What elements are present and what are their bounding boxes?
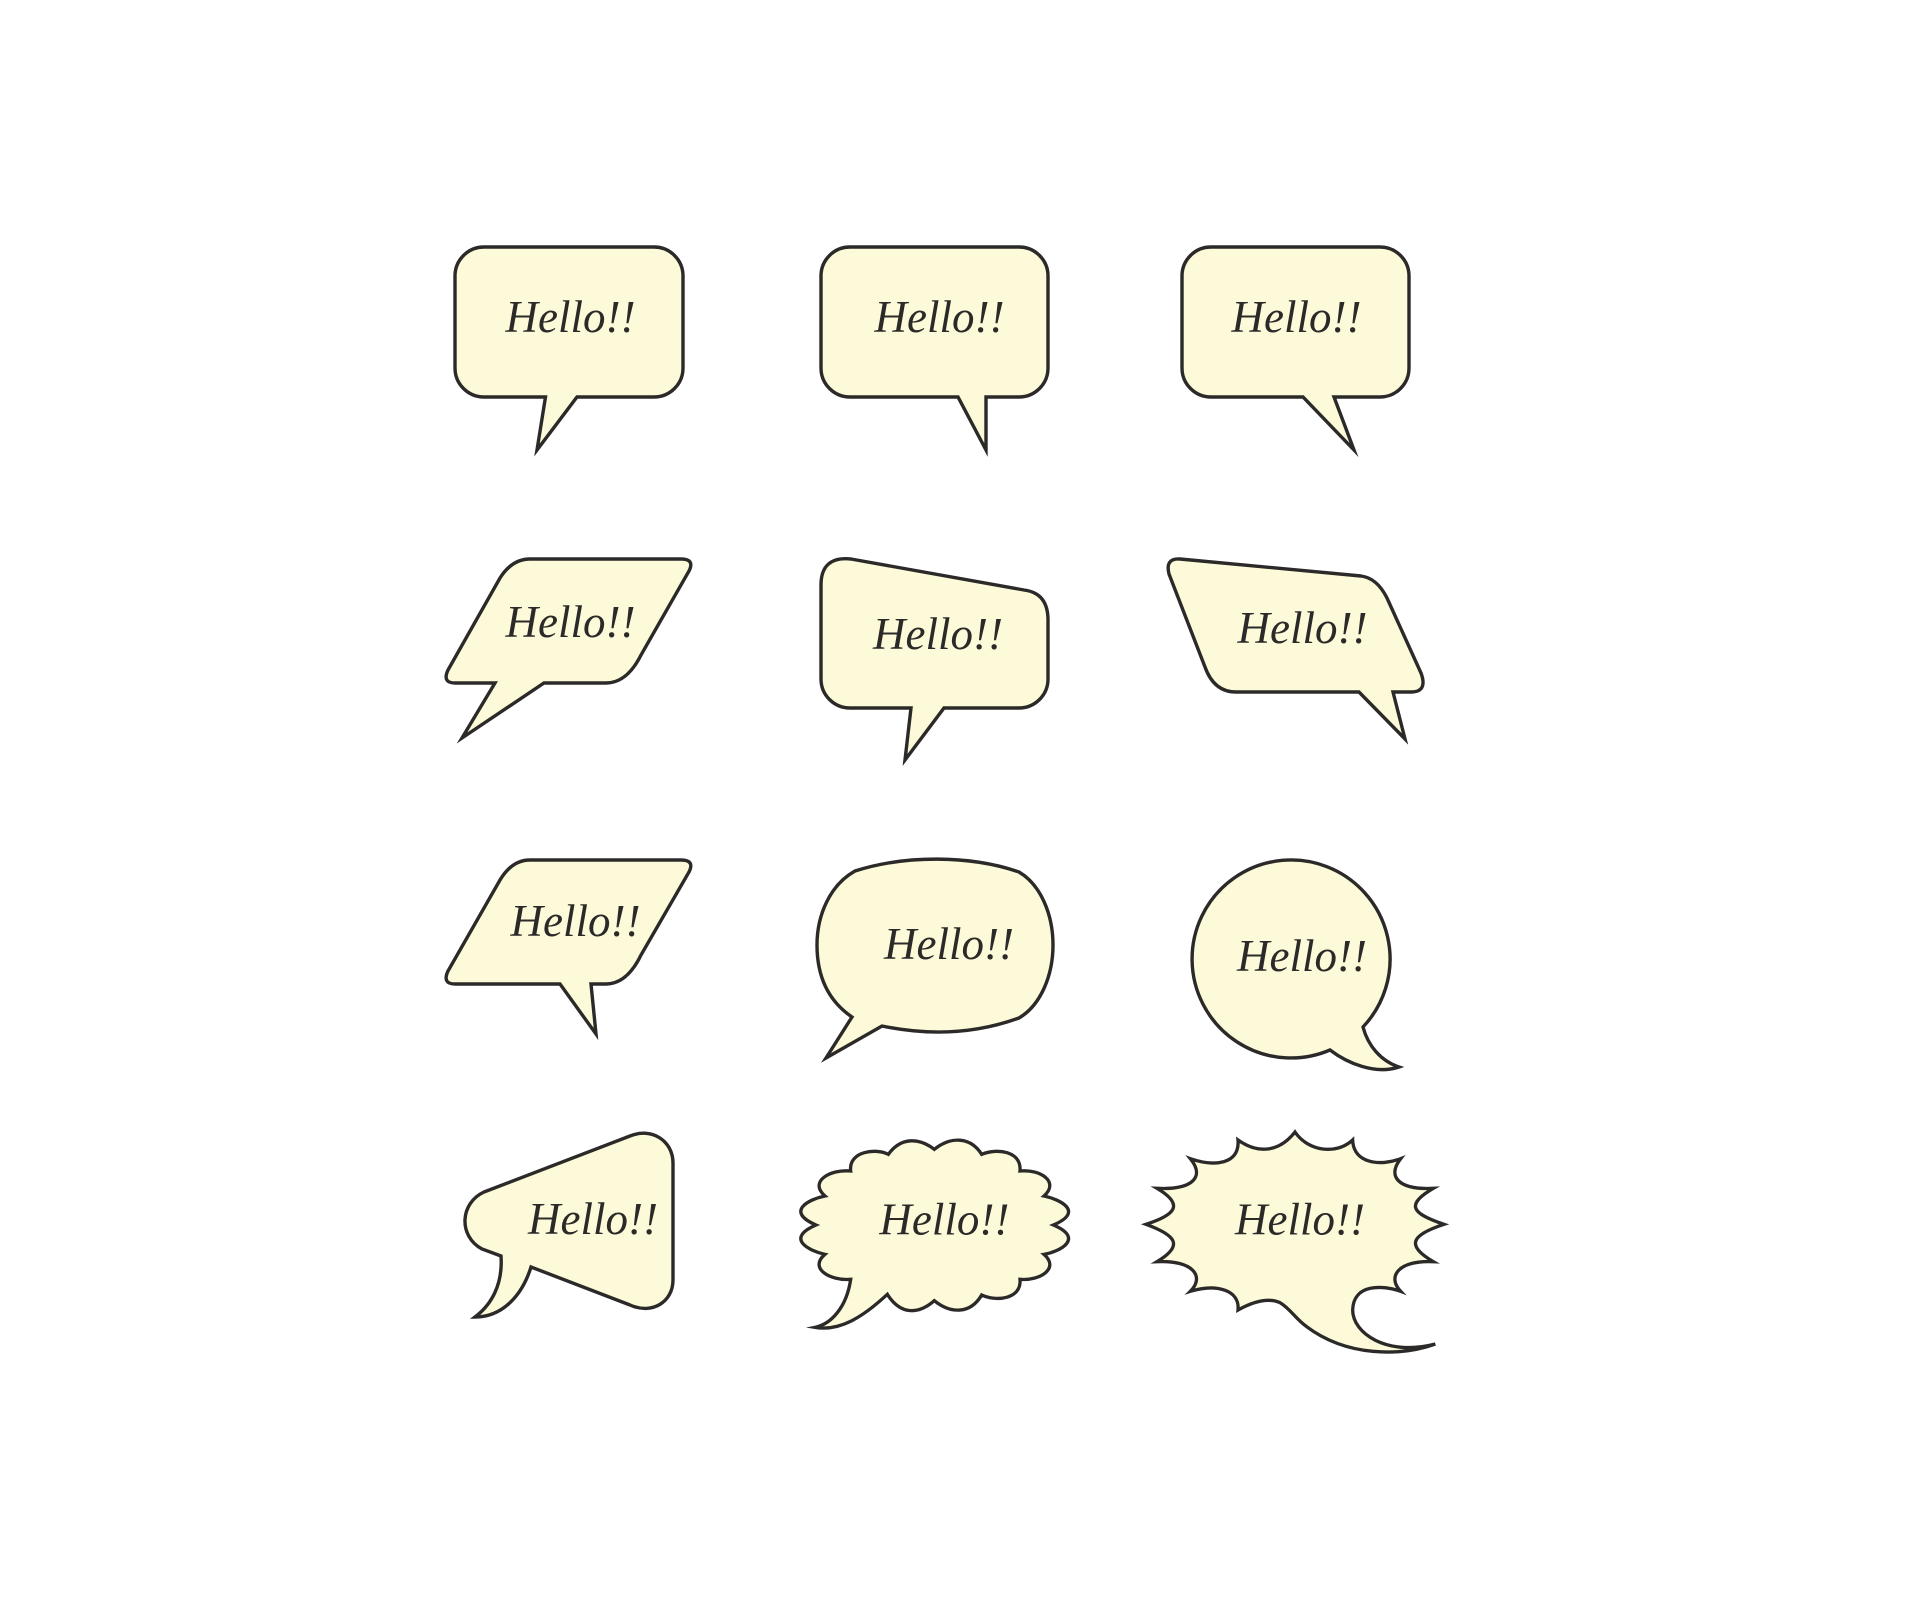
bubble 7: parallelogram, tail centre-right: Hello!! <box>509 896 640 946</box>
bubble 6: slanted parallelogram, tail right: Hello!! <box>1236 603 1368 653</box>
bubble 1: rounded rectangle, tail left <box>455 247 683 450</box>
bubble 10: rounded triangle, curved tail left <box>465 1133 673 1317</box>
bubble 10: rounded triangle, curved tail left: Hello!! <box>527 1194 658 1244</box>
bubble 8: rounded bulging oval, tail lower left <box>817 859 1053 1058</box>
bubble 9: circle, curved tail right <box>1192 860 1399 1070</box>
bubble 12: spiky burst, swooping tail right <box>1146 1132 1444 1352</box>
bubble 9: circle, curved tail right: Hello!! <box>1236 931 1367 981</box>
bubble 5: slanted top rectangle, tail left <box>821 559 1048 760</box>
bubble 7: parallelogram, tail centre-right <box>446 860 691 1034</box>
bubble 3: rounded rectangle, tail right <box>1182 247 1409 450</box>
bubble 4: parallelogram, tail left <box>446 559 691 738</box>
bubble 6: slanted parallelogram, tail right <box>1168 559 1423 739</box>
bubble 2: rounded rectangle, tail centre-right <box>821 247 1048 450</box>
bubble 12: spiky burst, swooping tail right: Hello!! <box>1234 1194 1365 1244</box>
bubble 2: rounded rectangle, tail centre-right: Hello!! <box>873 292 1004 342</box>
bubble 4: parallelogram, tail left: Hello!! <box>504 597 636 647</box>
bubble 3: rounded rectangle, tail right: Hello!! <box>1230 292 1362 342</box>
bubble 5: slanted top rectangle, tail left: Hello!! <box>872 609 1003 659</box>
bubble 8: rounded bulging oval, tail lower left: Hello!! <box>883 919 1014 969</box>
bubble 11: scalloped cloud, curved tail left <box>801 1140 1069 1328</box>
bubble 11: scalloped cloud, curved tail left: Hello!! <box>878 1194 1009 1244</box>
bubble 1: rounded rectangle, tail left: Hello!! <box>504 292 636 342</box>
